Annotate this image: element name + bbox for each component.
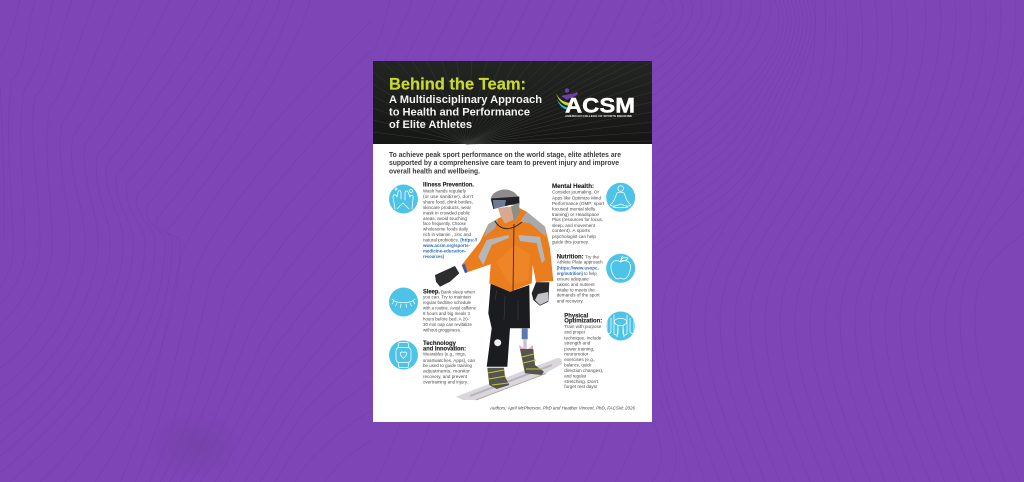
- text: technology and innovation: [423, 340, 475, 384]
- text: physical optimization: [564, 312, 603, 389]
- right side: long S curves: [915, 70, 1024, 482]
- pants: [487, 283, 530, 367]
- text: illness prevention: [422, 182, 478, 259]
- title: of Elite Athletes: [389, 119, 472, 131]
- text: sleep: hours before bed. A 20-: [423, 316, 469, 322]
- intro text: overall health and wellbeing.: [389, 167, 480, 176]
- text: illness prevention: natural probiotics. (https://: [423, 238, 478, 242]
- text: sleep: Sleep.: [423, 288, 440, 295]
- text: physical optimization: and proper: [564, 330, 586, 335]
- text: physical optimization: Optimization:: [564, 318, 602, 325]
- text: physical optimization: technique. Include: [564, 335, 602, 340]
- text: mental health: training) or Headspace: [552, 212, 599, 217]
- intro text: [389, 150, 622, 176]
- text: physical optimization: Physical: [564, 312, 589, 319]
- text: illness prevention: resources): [423, 254, 444, 259]
- text: physical optimization: stretching. Don't: [564, 379, 599, 384]
- text: mental health: guide this journey.: [552, 239, 589, 244]
- intro text: supported by a comprehensive care team to prevent injury and improve: [389, 158, 620, 167]
- text: sleep: [423, 288, 476, 332]
- text: mental health: content). A sports: [552, 228, 591, 233]
- text: nutrition: Athlete Plate approach: [557, 260, 603, 265]
- panel: mental health: [552, 183, 635, 244]
- text: mental health: Apps like Optimize Mind: [552, 195, 601, 200]
- text: nutrition: and recovery.: [557, 298, 584, 303]
- text: nutrition: demands of the sport: [557, 293, 600, 298]
- right side: upper corner lines: [652, 0, 771, 157]
- text: nutrition: [557, 253, 603, 303]
- text: mental health: Performance (OMP; sport: [552, 201, 605, 206]
- text: nutrition: org/nutrition) to help: [557, 271, 597, 276]
- text: physical optimization: strength and: [564, 341, 591, 346]
- boots: [487, 349, 544, 389]
- jacket: [462, 208, 553, 292]
- text: illness prevention: rich in vitamin , zinc and: [423, 232, 471, 237]
- text: nutrition: Try the: [585, 254, 599, 259]
- above and below the card: [372, 0, 650, 60]
- text: illness prevention: medicine-education-: [423, 248, 466, 253]
- ACSM logo: ACSM: [565, 93, 635, 117]
- text: sleep: without grogginess.: [423, 327, 461, 332]
- authors credit: Authors: April McPherson, PhD and Heather Vincent, PhD, FACSM; 2026: [489, 406, 635, 412]
- text: mental health: Consider journaling. Or: [552, 190, 599, 195]
- left side: diagonal lines: [120, 20, 372, 482]
- left side: kinked lines: [0, 0, 310, 482]
- header band: [373, 61, 652, 144]
- title: [389, 76, 542, 131]
- ACSM logo: AMERICAN COLLEGE OF SPORTS MEDICINE: [565, 114, 632, 118]
- text: illness prevention: wholesome foods daily: [423, 227, 469, 232]
- text: illness prevention: face frequently. Choose: [423, 221, 466, 226]
- panel: sleep: [389, 288, 476, 332]
- text: technology and innovation: smartwatches, Apps), can: [423, 358, 475, 363]
- text: sleep: with a routine. Avoid caffeine: [423, 306, 476, 311]
- text: physical optimization: forget rest days!: [564, 384, 597, 389]
- text: technology and innovation: overtraining and injury.: [423, 379, 468, 384]
- text: technology and innovation: Technology: [423, 340, 457, 347]
- panel: nutrition: [557, 253, 635, 303]
- panel: physical optimization: [564, 312, 635, 389]
- icon: closed eye: [389, 288, 418, 316]
- panel: illness prevention: [389, 182, 478, 259]
- text: illness prevention: mask in crowded public: [423, 210, 471, 215]
- text: sleep: 30 min nap can revitalize: [423, 322, 472, 327]
- text: mental health: [552, 183, 605, 244]
- snowboard: [456, 358, 562, 400]
- text: mental health: psychologist can help: [552, 234, 596, 239]
- title: A Multidisciplinary Approach: [389, 94, 542, 106]
- prosthetic leg: [519, 328, 533, 352]
- text: nutrition: ensure adequate: [557, 277, 589, 282]
- icon: dumbbell and brain: [606, 312, 635, 340]
- icon: smartwatch: [389, 340, 418, 370]
- text: nutrition: intake to meets the: [557, 287, 595, 292]
- text: nutrition: caloric and nutrient: [557, 282, 595, 287]
- text: physical optimization: neuromotor: [564, 352, 589, 357]
- head with helmet and goggles: [491, 189, 520, 224]
- text: illness prevention: share food, drink bottles,: [423, 200, 473, 204]
- text: nutrition: (https://www.usopc.: [557, 265, 599, 270]
- text: physical optimization: balance, quick: [564, 363, 592, 368]
- text: mental health: focused mental skills: [552, 206, 596, 211]
- text: physical optimization: Train with purpose: [564, 324, 602, 329]
- text: illness prevention: www.acsm.org/sports-: [422, 243, 470, 248]
- text: physical optimization: exercises (e.g.,: [564, 357, 595, 362]
- text: illness prevention: (or use sanitizer), don't: [423, 194, 474, 199]
- text: physical optimization: power training,: [564, 346, 594, 351]
- gloves: [435, 266, 549, 306]
- text: technology and innovation: recovery, and prevent: [423, 374, 468, 379]
- knee patch: [494, 339, 501, 346]
- title: Behind the Team:: [389, 76, 526, 94]
- athlete photo: [435, 189, 562, 400]
- panel: technology and innovation: [389, 340, 475, 384]
- text: mental health: sleep, and movement: [552, 223, 596, 228]
- text: technology and innovation: be used to guide training: [423, 363, 472, 368]
- text: technology and innovation: Wearables (e.g., rings,: [423, 352, 466, 356]
- ACSM logo: [556, 88, 635, 118]
- text: physical optimization: and regular: [564, 374, 587, 379]
- text: nutrition: Nutrition:: [557, 253, 584, 260]
- text: sleep: 8 hours and big meals 3: [423, 311, 470, 316]
- text: sleep: regular bedtime schedule: [423, 300, 471, 305]
- text: illness prevention: skincare products, wear: [423, 205, 471, 210]
- text: technology and innovation: adjustments, monitor: [423, 369, 470, 374]
- text: illness prevention: areas, avoid touching: [423, 216, 467, 221]
- text: mental health: Plus (resources for focus,: [552, 217, 603, 222]
- infographic card: [373, 61, 652, 422]
- icon: hands and germs: [389, 184, 418, 214]
- text: sleep: Bank sleep when: [441, 289, 475, 294]
- icon: meditating figure: [606, 183, 635, 212]
- intro text: To achieve peak sport performance on the world stage, elite athletes are: [389, 150, 622, 159]
- text: technology and innovation: and Innovation:: [423, 345, 466, 352]
- title: to Health and Performance: [389, 106, 530, 118]
- text: mental health: Mental Health:: [552, 183, 594, 190]
- text: physical optimization: direction changes),: [564, 368, 603, 373]
- text: illness prevention: Illness Prevention.: [423, 182, 474, 188]
- text: illness prevention: Wash hands regularly: [423, 189, 467, 194]
- text: sleep: you can. Try to maintain: [423, 295, 471, 300]
- icon: apple: [606, 254, 635, 283]
